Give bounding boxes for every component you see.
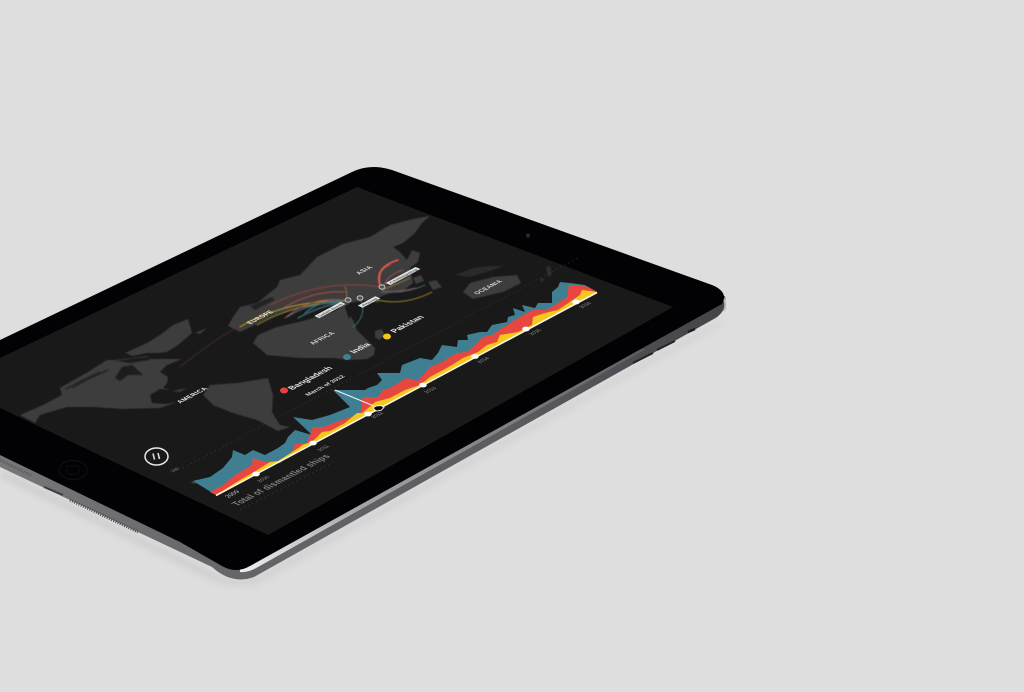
legend: India — [343, 341, 373, 360]
world map — [20, 216, 521, 431]
continent labels: ASIA — [354, 265, 375, 276]
drop shadow — [0, 322, 724, 584]
legend: Bangladesh: Bangladesh — [285, 365, 335, 391]
Southeast Asia islands — [413, 275, 442, 290]
continent labels: AFRICA — [308, 331, 338, 346]
Africa — [253, 306, 375, 360]
year labels: 2015 — [528, 329, 544, 336]
South America — [203, 378, 290, 431]
axis tick labels: 100 — [169, 467, 182, 473]
axis tick labels — [169, 467, 201, 485]
year labels: 2010 — [256, 476, 272, 483]
continent labels — [175, 265, 505, 404]
year labels — [223, 302, 594, 499]
continent labels: EUROPE — [245, 309, 277, 325]
legend: Pakistan: Pakistan — [387, 314, 426, 334]
stacked area chart — [193, 282, 597, 499]
black bezel — [0, 167, 724, 570]
port label: Gadani — [314, 302, 346, 318]
metal side edge — [0, 296, 725, 579]
Eurasia — [228, 216, 430, 332]
icon: pause button — [145, 448, 168, 465]
legend — [280, 314, 426, 394]
dim islands and lakes — [66, 266, 552, 389]
year labels: 2014 — [476, 357, 492, 364]
shipping route arcs — [180, 260, 432, 367]
port label: Alang: Alang — [360, 298, 379, 307]
screen — [0, 187, 673, 535]
faint dotted grid lines — [183, 258, 578, 510]
Greenland — [125, 319, 192, 356]
year labels: 2009 — [223, 490, 242, 499]
Madagascar — [375, 329, 385, 340]
callout: March of 2012: March of 2012 — [304, 374, 348, 397]
year labels: 2012 — [370, 412, 386, 419]
camera — [526, 234, 530, 238]
Cuba — [172, 388, 187, 392]
chart title: Total of dismantled ships — [229, 453, 333, 507]
home button — [59, 460, 87, 480]
continent labels: AMERICA — [175, 386, 210, 404]
Iceland — [195, 328, 207, 334]
port markers — [345, 285, 385, 302]
Australia — [463, 275, 521, 299]
callout: March of 2012 — [304, 374, 384, 411]
port label: Gadani: Gadani Beach — [317, 303, 345, 318]
area: India — [193, 282, 597, 495]
baseline — [216, 292, 597, 496]
continent labels: OCEANIA — [473, 279, 505, 296]
year labels: 2013 — [423, 387, 439, 394]
screen surface — [0, 187, 673, 535]
North America — [20, 356, 182, 423]
year labels: 2011 — [316, 445, 331, 452]
axis tick labels: 50 — [190, 480, 201, 485]
year dots — [252, 300, 580, 476]
year labels: 2016 — [578, 302, 594, 309]
area: Bangladesh — [210, 285, 597, 495]
port label: Chittagong: Chittagong — [388, 268, 419, 284]
tablet — [0, 167, 725, 584]
port label: Alang — [358, 296, 381, 308]
side details: speaker and buttons — [0, 329, 695, 532]
legend: India: India — [347, 341, 373, 354]
area: Pakistan — [216, 290, 597, 495]
